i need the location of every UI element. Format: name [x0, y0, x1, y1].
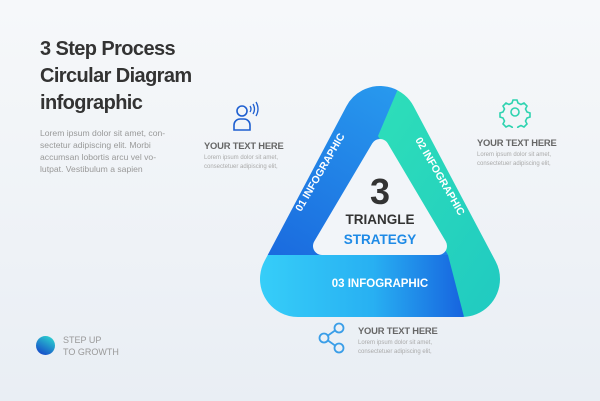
text: Lorem ipsum dolor sit amet, [358, 340, 432, 346]
description: accumsan lobortis arcu vel vo- [40, 152, 156, 162]
heading: YOUR TEXT HERE [477, 137, 557, 148]
label 01: 01 INFOGRAPHIC [293, 131, 348, 214]
number 3: 3 [370, 171, 390, 212]
text: Lorem ipsum dolor sit amet, [477, 152, 551, 158]
heading: YOUR TEXT HERE [204, 140, 284, 151]
description: sectetur adipiscing elit. Morbi [40, 140, 151, 150]
text [358, 340, 432, 354]
text: consectetuer adipiscing elit, [477, 160, 551, 166]
text: Lorem ipsum dolor sit amet, [204, 155, 278, 161]
block: share [318, 322, 438, 354]
description: Lorem ipsum dolor sit amet, con- [40, 128, 165, 138]
heading: YOUR TEXT HERE [358, 325, 438, 336]
text: TO GROWTH [63, 347, 119, 357]
title: 3 Step Process [40, 38, 175, 60]
band: right green [378, 90, 500, 317]
block: gear [477, 99, 557, 166]
diagram: triangle [260, 86, 500, 317]
icon: gear [499, 99, 531, 128]
label 02: 02 INFOGRAPHIC [412, 135, 467, 218]
footer: step up [36, 335, 119, 357]
text [477, 152, 551, 166]
band: bottom [260, 255, 464, 317]
title: infographic [40, 92, 142, 114]
text: consectetuer adipiscing elit, [204, 164, 278, 170]
text: consectetuer adipiscing elit, [358, 348, 432, 354]
inner triangle [322, 148, 438, 246]
icon: person [233, 102, 259, 131]
text: strategy: STRATEGY [344, 232, 416, 247]
label 03: 03 INFOGRAPHIC [332, 278, 428, 290]
description [40, 128, 165, 174]
title: Circular Diagram [40, 65, 192, 87]
icon: gradient circle [36, 336, 55, 355]
text: triangle: TRIANGLE [346, 212, 414, 227]
text [63, 335, 119, 357]
icon: share [318, 322, 344, 354]
description: lutpat. Vestibulum a sapien [40, 164, 143, 174]
title [40, 38, 192, 114]
block: person [204, 102, 284, 170]
text: STEP UP [63, 335, 101, 345]
text [204, 154, 278, 170]
